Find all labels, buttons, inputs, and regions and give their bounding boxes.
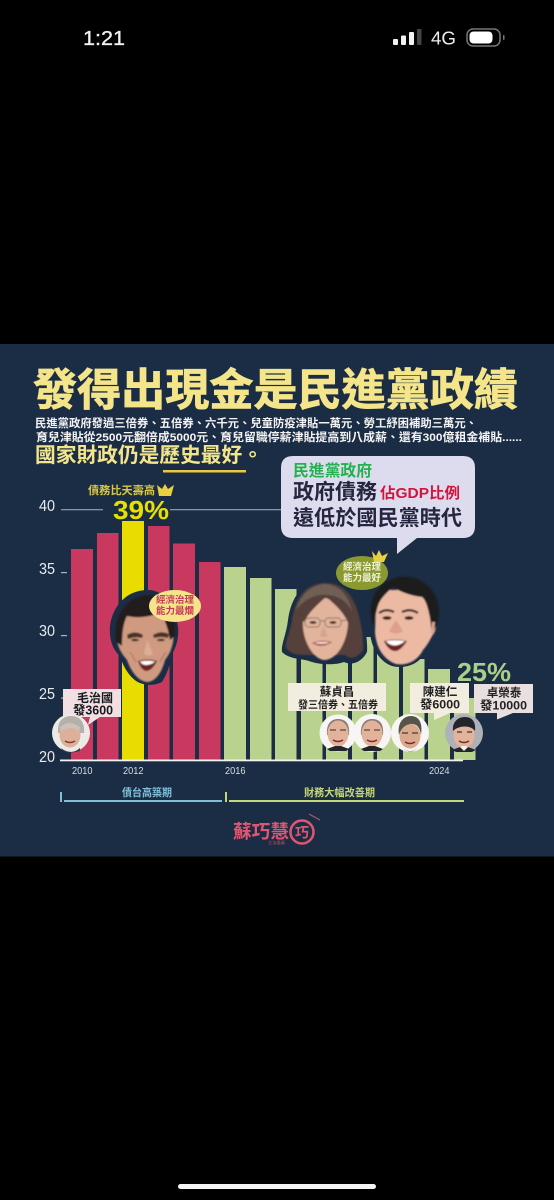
avatar: Su Tseng-chang, first term xyxy=(320,714,356,752)
x axis line xyxy=(60,760,463,761)
callout: Cho Jung-tai: 發10000 xyxy=(480,698,527,712)
callout: Su Tseng-chang: 發三倍券、五倍券 xyxy=(298,698,378,711)
speech bubble: debt to GDP: 遠低於國民黨時代 xyxy=(293,507,462,530)
badge: worst economic management: 能力最爛 xyxy=(156,605,194,617)
callout: debt peak 39%: 債務比天壽高 xyxy=(88,483,155,497)
subtitle text block xyxy=(35,416,522,444)
callout: Su Tseng-chang xyxy=(288,683,386,711)
portrait: Lai Ching-te xyxy=(367,574,441,667)
signal strength icon xyxy=(393,29,422,45)
callout: Chen Chien-jen xyxy=(410,683,469,720)
bar: 2012 peak xyxy=(122,521,144,760)
callout: debt peak 39% xyxy=(88,483,174,525)
x axis year labels: 2010 xyxy=(72,766,93,777)
speech bubble: debt to GDP xyxy=(281,456,475,554)
y axis labels and ticks: 20 xyxy=(39,749,55,766)
callout: Chen Chien-jen: 發6000 xyxy=(420,696,460,712)
logo: Su Chiao-hui xyxy=(233,814,320,845)
title: 發得出現金是民進黨政績 xyxy=(33,366,518,415)
subtitle text block: 育兒津貼從2500元翻倍成5000元、育兒留職停薪津貼提高到八成薪、還有300億租金補貼...... xyxy=(36,430,522,444)
status bar time: 1:21 xyxy=(83,27,125,50)
logo: Su Chiao-hui: 立法委員 xyxy=(268,839,285,845)
badge: worst economic management: 經濟治理 xyxy=(156,594,194,606)
avatar: Su Tseng-chang, second term xyxy=(353,714,391,752)
avatar: Mao Chi-kuo xyxy=(52,714,90,752)
callout: debt peak 39%: 39% xyxy=(113,495,169,525)
x axis year labels xyxy=(72,766,450,777)
callout: Mao Chi-kuo: 毛治國 xyxy=(77,690,113,705)
portrait: Tsai Ing-wen xyxy=(282,580,367,664)
bars: improvement period xyxy=(224,567,476,760)
callout: 25%: 25% xyxy=(457,659,511,687)
phone status bar xyxy=(83,27,504,50)
battery icon xyxy=(467,29,504,46)
speech bubble: debt to GDP: 佔GDP比例 xyxy=(380,485,460,502)
period marker: fiscal improvement: 財務大幅改善期 xyxy=(304,786,375,799)
headline: best national finances: 國家財政仍是歷史最好。 xyxy=(35,443,263,467)
badge: worst economic management xyxy=(149,590,201,622)
callout: Chen Chien-jen: 陳建仁 xyxy=(423,684,458,698)
phone home indicator xyxy=(178,1184,376,1189)
speech bubble: debt to GDP: 民進黨政府 xyxy=(293,461,372,480)
period marker: high debt: 債台高築期 xyxy=(122,786,172,799)
network label: 4G xyxy=(431,28,456,48)
axis gridline at 40 xyxy=(61,509,282,510)
avatar: Chen Chien-jen xyxy=(391,714,429,752)
y axis labels and ticks: 25 xyxy=(39,686,55,703)
callout: Cho Jung-tai xyxy=(474,684,533,720)
bars: high debt period xyxy=(71,526,220,760)
logo: Su Chiao-hui: 蘇巧慧 xyxy=(233,821,289,842)
icon: crown xyxy=(372,550,388,562)
bar chart xyxy=(39,498,476,777)
logo: Su Chiao-hui: 巧 xyxy=(295,824,309,840)
y axis labels and ticks: 35 xyxy=(39,561,55,578)
y axis labels and ticks xyxy=(39,498,67,766)
y axis labels and ticks: 30 xyxy=(39,623,55,640)
subtitle text block: 民進黨政府發過三倍券、五倍券、六千元、兒童防疫津貼一萬元、勞工紓困補助三萬元、 xyxy=(35,416,477,430)
x axis year labels: 2012 xyxy=(123,766,144,777)
infographic panel background xyxy=(0,344,554,856)
badge: best economic management: 能力最好 xyxy=(343,572,381,584)
callout: Cho Jung-tai: 卓榮泰 xyxy=(487,686,522,700)
x axis year labels: 2016 xyxy=(225,766,246,777)
speech bubble: debt to GDP: 政府債務 xyxy=(293,480,377,504)
callout: Su Tseng-chang: 蘇貞昌 xyxy=(320,684,354,698)
callout: Mao Chi-kuo: 發3600 xyxy=(73,702,113,718)
badge: best economic management: 經濟治理 xyxy=(343,561,381,573)
y axis labels and ticks: 40 xyxy=(39,498,55,515)
callout: Mao Chi-kuo xyxy=(52,689,121,752)
portrait: Ma Ying-jeou xyxy=(110,590,178,685)
x axis year labels: 2024 xyxy=(429,766,450,777)
avatar: Cho Jung-tai xyxy=(445,714,483,752)
badge: best economic management xyxy=(336,550,388,590)
icon: crown xyxy=(157,484,174,496)
